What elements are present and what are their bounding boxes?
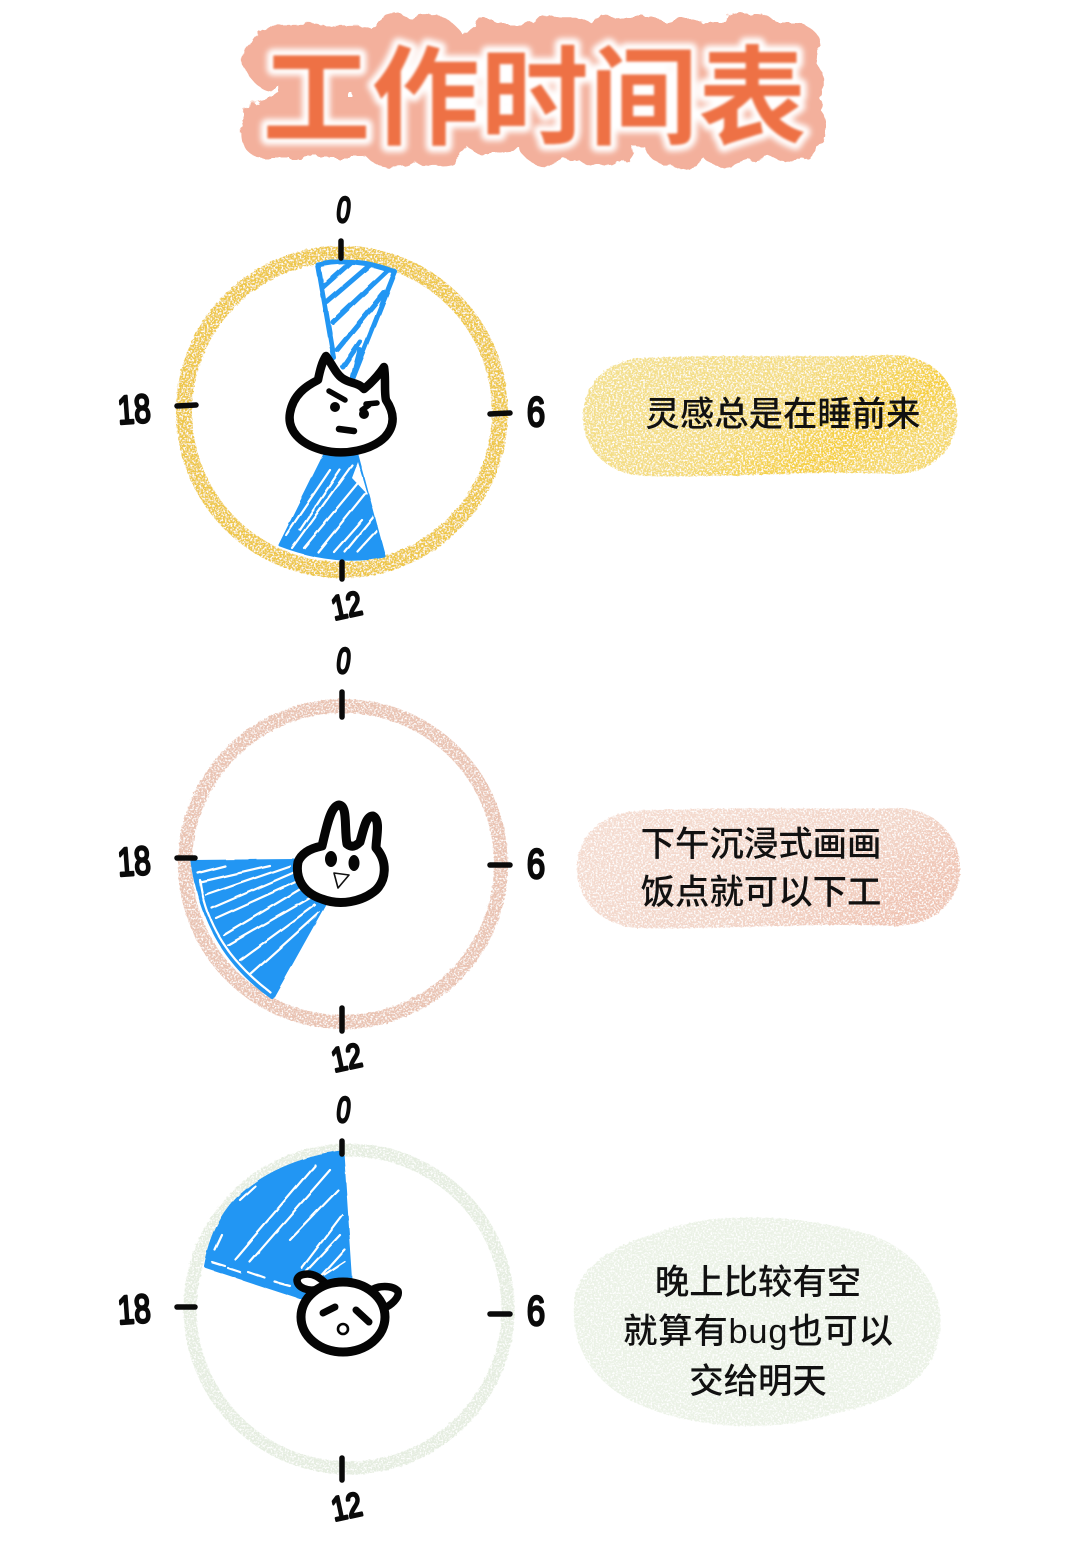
- clock ring 3: [190, 1150, 508, 1468]
- callout 2: 下午沉浸式画画: [641, 826, 881, 864]
- sector: evening: [206, 1153, 351, 1300]
- callout 1: 灵感总是在睡前来: [645, 396, 921, 434]
- icon: rabbit: [297, 805, 384, 902]
- callout 3: [574, 1217, 941, 1426]
- callout 3: 交给明天: [689, 1363, 827, 1401]
- title: 工作时间表: [262, 38, 808, 159]
- label 6: 6: [527, 840, 545, 887]
- ticks 3: [177, 1141, 510, 1480]
- clock ring 1: [184, 254, 500, 570]
- title: 工作时间表: [260, 33, 806, 154]
- callout 3: 就算有bug也可以: [623, 1313, 893, 1351]
- sector: noon hatch: [280, 450, 384, 559]
- label 18: 18: [116, 1287, 152, 1333]
- panel: clock 2: [116, 640, 545, 1080]
- label 18: 18: [116, 387, 152, 433]
- label 0: 0: [334, 1089, 353, 1131]
- ticks 2: [177, 692, 510, 1031]
- label 6: 6: [527, 388, 545, 435]
- panel: clock 3: [116, 1089, 545, 1529]
- callout 2: [577, 808, 960, 928]
- label 0: 0: [334, 640, 353, 682]
- ticks 1: [177, 241, 510, 579]
- label 12: 12: [328, 584, 365, 628]
- callout 3: 晚上比较有空: [655, 1264, 861, 1302]
- sector: midnight hatch: [318, 262, 395, 378]
- label 12: 12: [328, 1485, 365, 1529]
- callout 2: 饭点就可以下工: [641, 874, 881, 912]
- callout 1: [583, 355, 957, 476]
- label 12: 12: [328, 1036, 365, 1080]
- icon: panda: [297, 1274, 398, 1352]
- panel: clock 1: [116, 189, 545, 628]
- icon: cat: [290, 356, 393, 452]
- title: 工作时间表: [262, 38, 808, 159]
- label 18: 18: [116, 839, 152, 885]
- label 6: 6: [527, 1287, 545, 1334]
- clock ring 2: [185, 706, 501, 1022]
- sector: afternoon: [193, 861, 325, 997]
- label 0: 0: [334, 189, 353, 231]
